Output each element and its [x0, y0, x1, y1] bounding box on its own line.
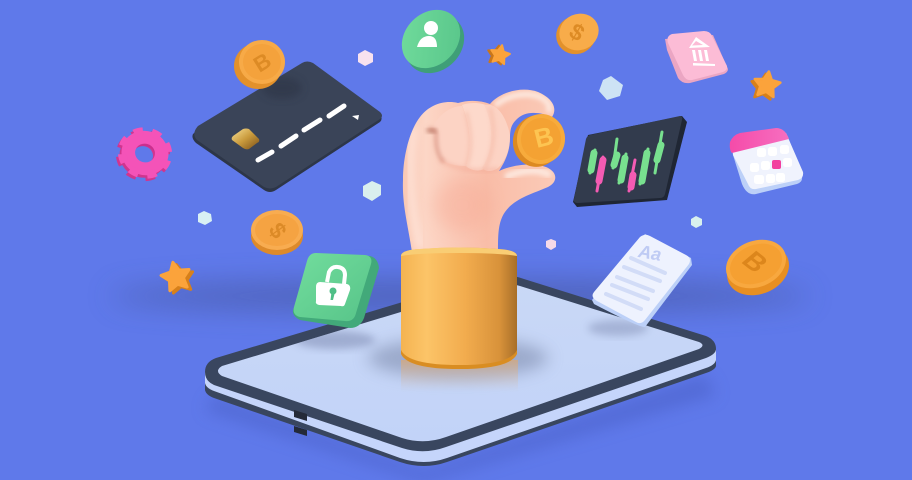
dollar coin top: $	[565, 18, 589, 47]
calendar dots	[750, 145, 792, 184]
card triangle mark	[352, 115, 359, 120]
dollar coin left: $	[264, 218, 292, 243]
document lines	[606, 258, 665, 309]
cuff	[401, 248, 517, 369]
cube blue	[599, 76, 623, 100]
document title: Aa	[636, 241, 663, 265]
small cube pale green	[363, 181, 381, 201]
small cube pink near tablet	[546, 239, 556, 250]
document page	[592, 234, 692, 327]
star top right	[750, 69, 782, 100]
tablet top rim	[205, 275, 716, 451]
small cube left	[198, 211, 212, 225]
palm shade	[433, 180, 482, 230]
tablet	[205, 275, 716, 480]
small cube right	[691, 216, 702, 228]
tablet drop shadow	[205, 375, 716, 480]
calendar header	[730, 128, 789, 153]
hand with coin	[403, 90, 570, 252]
bitcoin coin above card: B	[249, 48, 276, 77]
cuff top lip	[401, 248, 517, 256]
tablet base edge	[205, 350, 716, 466]
tablet ports	[294, 410, 307, 436]
card number dashes	[258, 106, 344, 160]
hand shading, clipped to hand outline	[411, 94, 549, 245]
dollar coin top	[550, 7, 605, 61]
dollar coin left	[251, 210, 303, 255]
calendar	[730, 128, 803, 194]
bitcoin coin above card	[234, 40, 285, 89]
person badge	[390, 0, 476, 85]
small cube pink near card	[358, 50, 373, 66]
index finger highlight	[497, 94, 549, 110]
green candles	[590, 132, 662, 184]
thumb and index behind coin, palm	[403, 90, 555, 252]
calendar highlighted date	[772, 160, 781, 169]
tablet side band	[205, 350, 716, 462]
shadows on tablet screen	[295, 320, 648, 378]
star top middle	[486, 43, 511, 66]
credit card	[192, 62, 382, 192]
bitcoin coin right	[719, 231, 797, 304]
bitcoin coin right: B	[736, 246, 775, 278]
pink candles	[597, 157, 635, 191]
cuff bottom lip	[401, 350, 517, 369]
padlock icon	[316, 267, 350, 306]
bank icon tile	[665, 31, 728, 83]
fist fold	[428, 129, 444, 162]
bitcoin coin in fingers: B	[531, 120, 556, 154]
finger knuckles	[446, 106, 470, 166]
card chip	[232, 128, 259, 149]
illustration: hand holding bitcoin above a tablet	[116, 10, 804, 480]
thumb highlight	[508, 171, 548, 176]
bitcoin coin in fingers	[508, 110, 570, 171]
lock tile	[293, 253, 379, 328]
candlestick chart panel	[573, 116, 687, 207]
person icon	[424, 21, 438, 35]
finger crease lines	[466, 108, 493, 170]
background shadow band behind tablet	[110, 280, 810, 312]
bank icon	[689, 37, 715, 66]
wrist highlight	[411, 130, 420, 245]
gear	[114, 125, 174, 183]
cuff reflection	[401, 360, 518, 392]
card shadow from coin	[262, 77, 302, 99]
star left	[159, 259, 196, 295]
tablet screen	[218, 283, 702, 441]
gear hole inner wall	[137, 142, 157, 154]
